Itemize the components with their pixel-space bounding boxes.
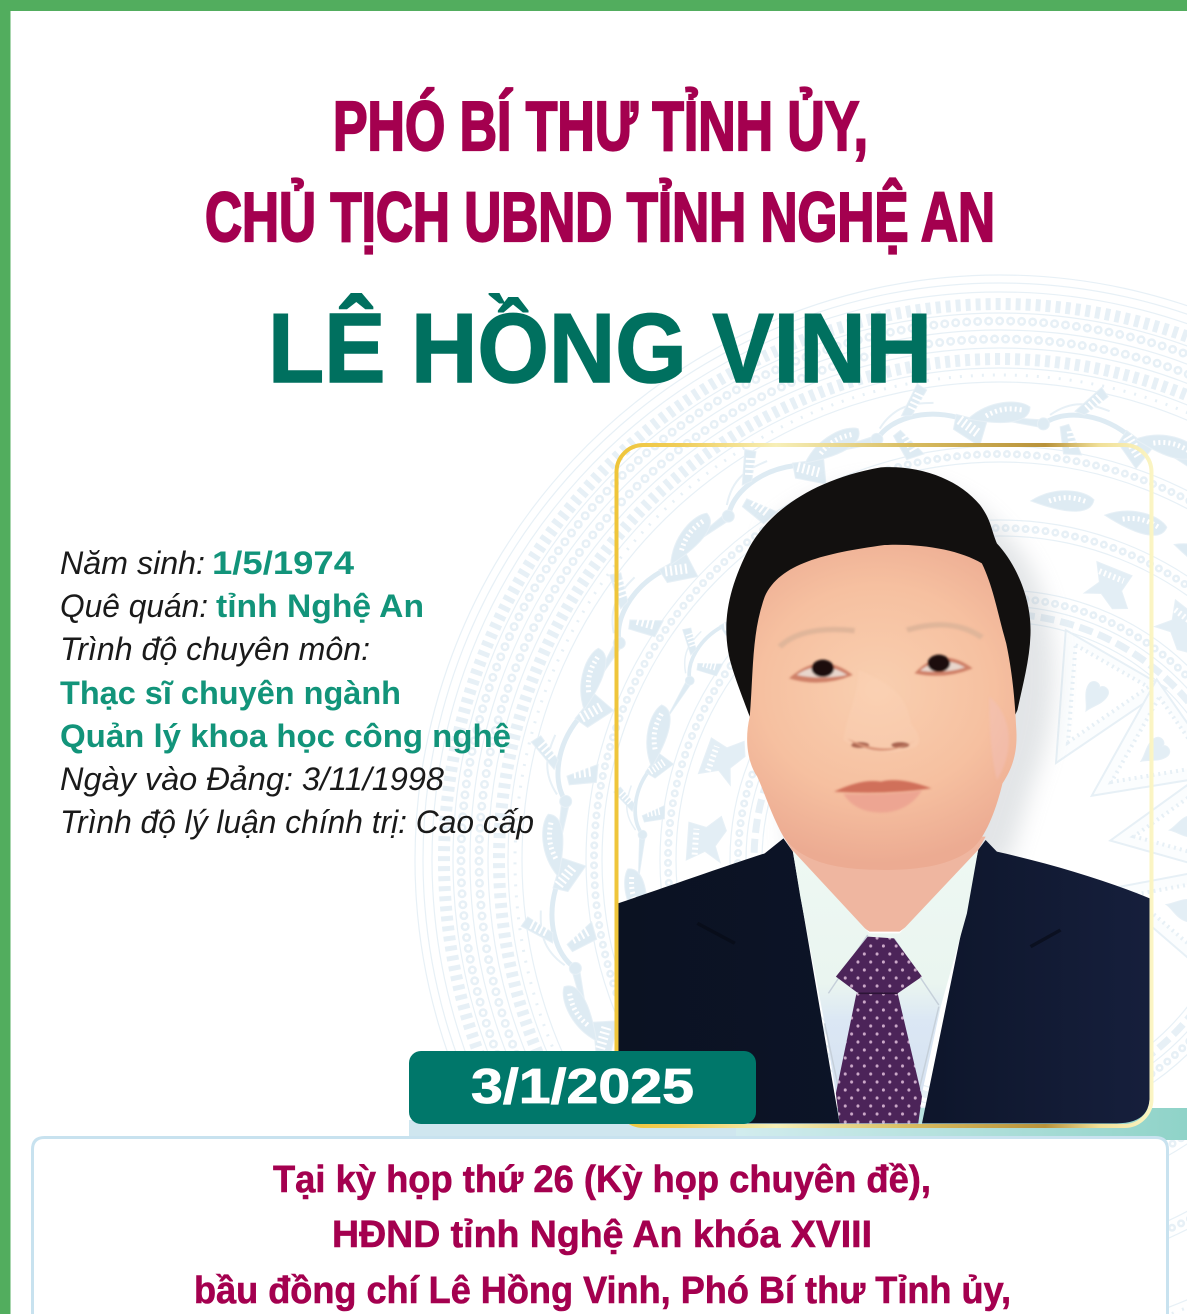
hair (726, 467, 1031, 730)
announcement panel: HĐND tỉnh Nghệ An khóa XVIII (332, 1214, 872, 1256)
biography details: tỉnh Nghệ An (216, 588, 424, 624)
biography details (60, 545, 534, 840)
biography details: Quản lý khoa học công nghệ (60, 718, 511, 754)
biography details: Trình độ chuyên môn: (60, 631, 370, 667)
date badge (409, 1051, 756, 1124)
necktie (836, 937, 922, 1123)
bronze drum pattern background (415, 275, 1187, 1314)
biography details: Năm sinh: (60, 545, 205, 581)
neck (783, 837, 986, 932)
collar shadows (825, 935, 939, 1093)
face (747, 545, 1017, 870)
suit (618, 838, 1150, 1123)
title (205, 86, 995, 256)
announcement panel: Tại kỳ họp thứ 26 (Kỳ họp chuyên đề), (273, 1159, 931, 1201)
title: PHÓ BÍ THƯ TỈNH ỦY, (333, 86, 868, 165)
biography details: Ngày vào Đảng: 3/11/1998 (60, 761, 444, 797)
facial features (780, 625, 1009, 813)
teal ribbon behind panel (409, 1108, 1187, 1140)
shirt (793, 850, 978, 1093)
announcement panel (32, 1138, 1168, 1314)
portrait photo (618, 467, 1150, 1123)
biography details: 1/5/1974 (212, 545, 354, 581)
gold portrait frame (616, 445, 1152, 1126)
lapel shadows (697, 923, 1061, 947)
biography details: Trình độ lý luận chính trị: Cao cấp (60, 804, 534, 840)
announcement panel: bầu đồng chí Lê Hồng Vinh, Phó Bí thư Tỉnh ủy, (194, 1270, 1011, 1312)
head shadow (768, 480, 1054, 863)
name heading: LÊ HỒNG VINH (268, 293, 932, 403)
biography details: Thạc sĩ chuyên ngành (60, 675, 401, 711)
biography details: Quê quán: (60, 588, 208, 624)
date badge: 3/1/2025 (471, 1060, 694, 1114)
